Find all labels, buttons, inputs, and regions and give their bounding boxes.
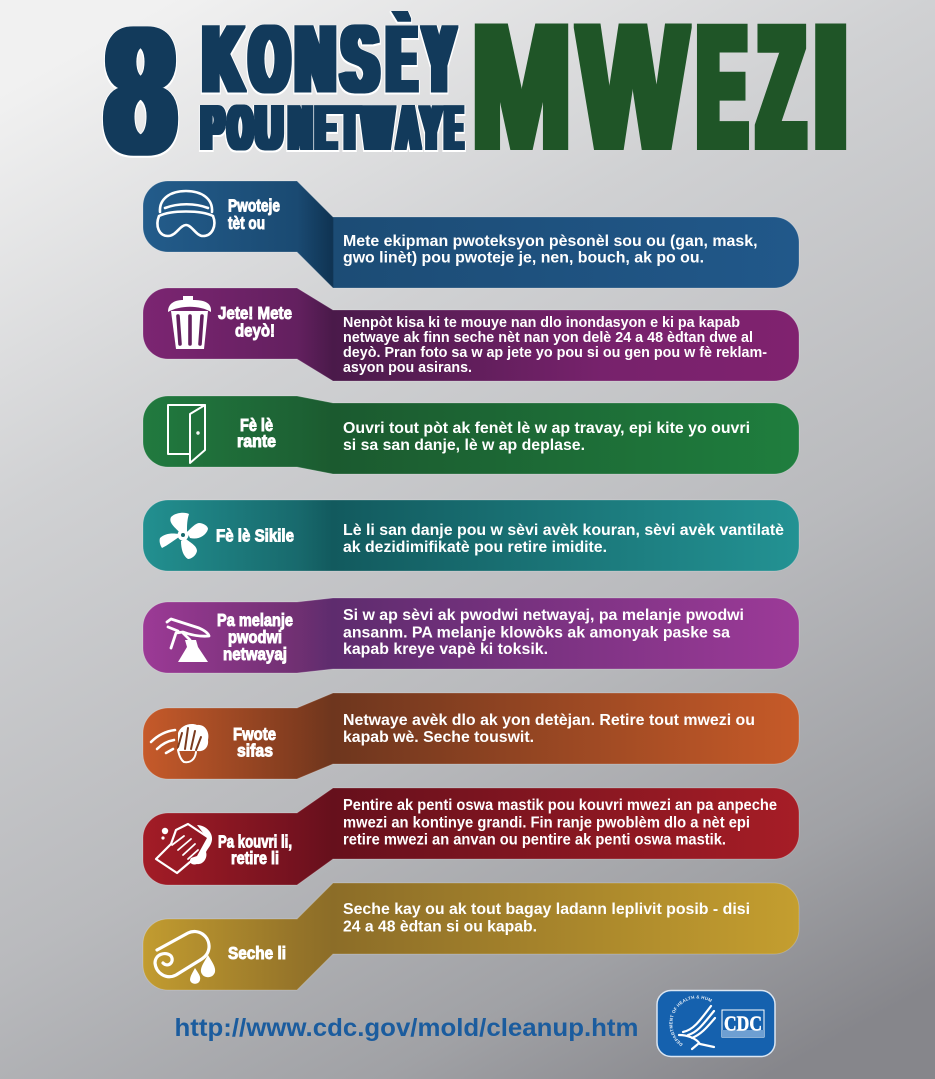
- title: E: [446, 93, 462, 163]
- body text: 24 a 48 èdtan si ou kapab.: [343, 918, 537, 936]
- label: [218, 832, 292, 868]
- label: Pwoteje: [228, 196, 280, 216]
- panel: pwoteje tèt ou: [143, 181, 799, 288]
- title POU NETWAYE: W: [362, 93, 393, 163]
- url link text: http://www.cdc.gov/mold/cleanup.htm: [174, 1014, 638, 1042]
- label: tèt ou: [228, 213, 265, 233]
- title KONSÈY: K: [203, 6, 243, 112]
- body text: mwezi an kontinye grandi. Fin ranje pwoblèm dlo a nèt epi: [343, 814, 750, 832]
- body text: Si w ap sèvi ak pwodwi netwayaj, pa melanje pwodwi: [343, 607, 744, 624]
- body text: [343, 712, 755, 746]
- logo badge: [657, 990, 775, 1056]
- icon: open door: [168, 405, 205, 463]
- title POU NETWAYE: E: [316, 93, 336, 163]
- panel: pa melanje pwodwi netwayaj: [143, 598, 799, 673]
- label: Pa kouvri li,: [218, 832, 292, 852]
- ribbon shape: [143, 788, 799, 885]
- ribbon shape: [143, 693, 799, 779]
- label: netwayaj: [223, 644, 287, 664]
- body text: gwo linèt) pou pwoteje je, nen, bouch, ak po ou.: [343, 250, 704, 266]
- body text: netwaye ak finn seche nèt nan yon delè 24 a 48 èdtan dwe al: [343, 330, 753, 346]
- label: Jete! Mete: [218, 303, 292, 323]
- icon: hand wiping surface: [151, 724, 208, 762]
- panel: jete mete deyò: [143, 288, 799, 381]
- body text: Netwaye avèk dlo ak yon detèjan. Retire tout mwezi ou: [343, 712, 755, 729]
- label: Fè lè Sikile: [216, 526, 294, 546]
- title POU NETWAYE: Y: [422, 93, 441, 163]
- body text: ansanm. PA melanje klowòks ak amonyak paske sa: [343, 624, 730, 642]
- panel: fè lè sikile: [143, 500, 799, 571]
- icon: fan: [160, 513, 208, 559]
- panel: fwote sifas: [143, 693, 799, 779]
- panel: fè lè rante: [143, 396, 799, 474]
- label: Fè lè: [240, 415, 273, 435]
- title KONSÈY: È: [388, 6, 416, 112]
- body text: asyon pou asirans.: [343, 360, 472, 376]
- icon: helmet and goggles: [157, 191, 214, 236]
- label: pwodwi: [228, 627, 282, 647]
- panel: seche li: [143, 883, 799, 990]
- body text: [343, 522, 784, 556]
- label: Seche li: [228, 943, 286, 963]
- body text: Pentire ak penti oswa mastik pou kouvri mwezi an pa anpeche: [343, 797, 777, 814]
- label: deyò!: [235, 320, 275, 340]
- body text: retire mwezi an anvan ou pentire ak penti oswa mastik.: [343, 832, 726, 848]
- body text: Ouvri tout pòt ak fenèt lè w ap travay, epi kite yo ouvri: [343, 420, 750, 437]
- body text: Nenpòt kisa ki te mouye nan dlo inondasyon e ki pa kapab: [343, 315, 740, 331]
- title POU NETWAYE: A: [398, 93, 419, 163]
- title POU NETWAYE: N: [289, 93, 312, 163]
- label: [217, 610, 293, 664]
- ribbon shape: [143, 396, 799, 474]
- title POU NETWAYE: O: [228, 93, 252, 163]
- body text: [343, 315, 767, 376]
- title POU NETWAYE: T: [340, 93, 359, 163]
- CDC wordmark: CDC: [724, 1012, 762, 1036]
- body text: Mete ekipman pwoteksyon pèsonèl sou ou (gan, mask,: [343, 233, 758, 250]
- ribbon shape: [143, 500, 799, 571]
- body text: Seche kay ou ak tout bagay ladann leplivit posib - disi: [343, 901, 750, 918]
- ribbon shape: [143, 883, 799, 990]
- body text: kapab kreye vapè ki toksik.: [343, 641, 548, 658]
- icon: spray bottle: [167, 619, 209, 662]
- body text: [343, 420, 750, 454]
- ribbon shape: [143, 181, 799, 288]
- title: Y: [424, 6, 454, 112]
- icon: trash can: [168, 296, 211, 349]
- body text: ak dezidimifikatè pou retire imidite.: [343, 539, 607, 556]
- icon: rolled towel with drops: [155, 931, 215, 984]
- title KONSÈY: S: [342, 6, 378, 112]
- body text: kapab wè. Seche touswit.: [343, 729, 534, 746]
- label: rante: [237, 431, 276, 451]
- ribbon shape: [143, 598, 799, 673]
- label: Pa melanje: [217, 610, 293, 630]
- label: [237, 415, 276, 451]
- body text: si sa san danje, lè w ap deplase.: [343, 437, 585, 454]
- label: [228, 196, 280, 233]
- title: [102, 11, 846, 158]
- panel: pa kouvri li retire li: [143, 788, 799, 885]
- body text: [343, 607, 744, 658]
- body text: [343, 797, 777, 848]
- title KONSÈY: O: [250, 6, 289, 112]
- body text: deyò. Pran foto sa w ap jete yo pou si ou gen pou w fè reklam-: [343, 345, 767, 361]
- HHS seal text: DEPARTMENT OF HEALTH & HUMAN SERVICES USA: [669, 995, 712, 1046]
- ribbon shape: [143, 288, 799, 381]
- title KONSÈY: N: [296, 6, 335, 112]
- body text: [343, 233, 758, 266]
- title POU NETWAYE: U: [256, 93, 282, 163]
- body text: Lè li san danje pou w sèvi avèk kouran, sèvi avèk vantilatè: [343, 522, 784, 539]
- label: sifas: [237, 740, 273, 760]
- icon: hand scrubbing with sponge: [156, 824, 212, 873]
- body text: [343, 901, 750, 936]
- label: [218, 303, 292, 340]
- label: Fwote: [233, 724, 276, 744]
- HHS eagle: [679, 1006, 715, 1049]
- label: retire li: [231, 848, 279, 868]
- title POU NETWAYE: P: [202, 93, 224, 163]
- label: [233, 724, 276, 760]
